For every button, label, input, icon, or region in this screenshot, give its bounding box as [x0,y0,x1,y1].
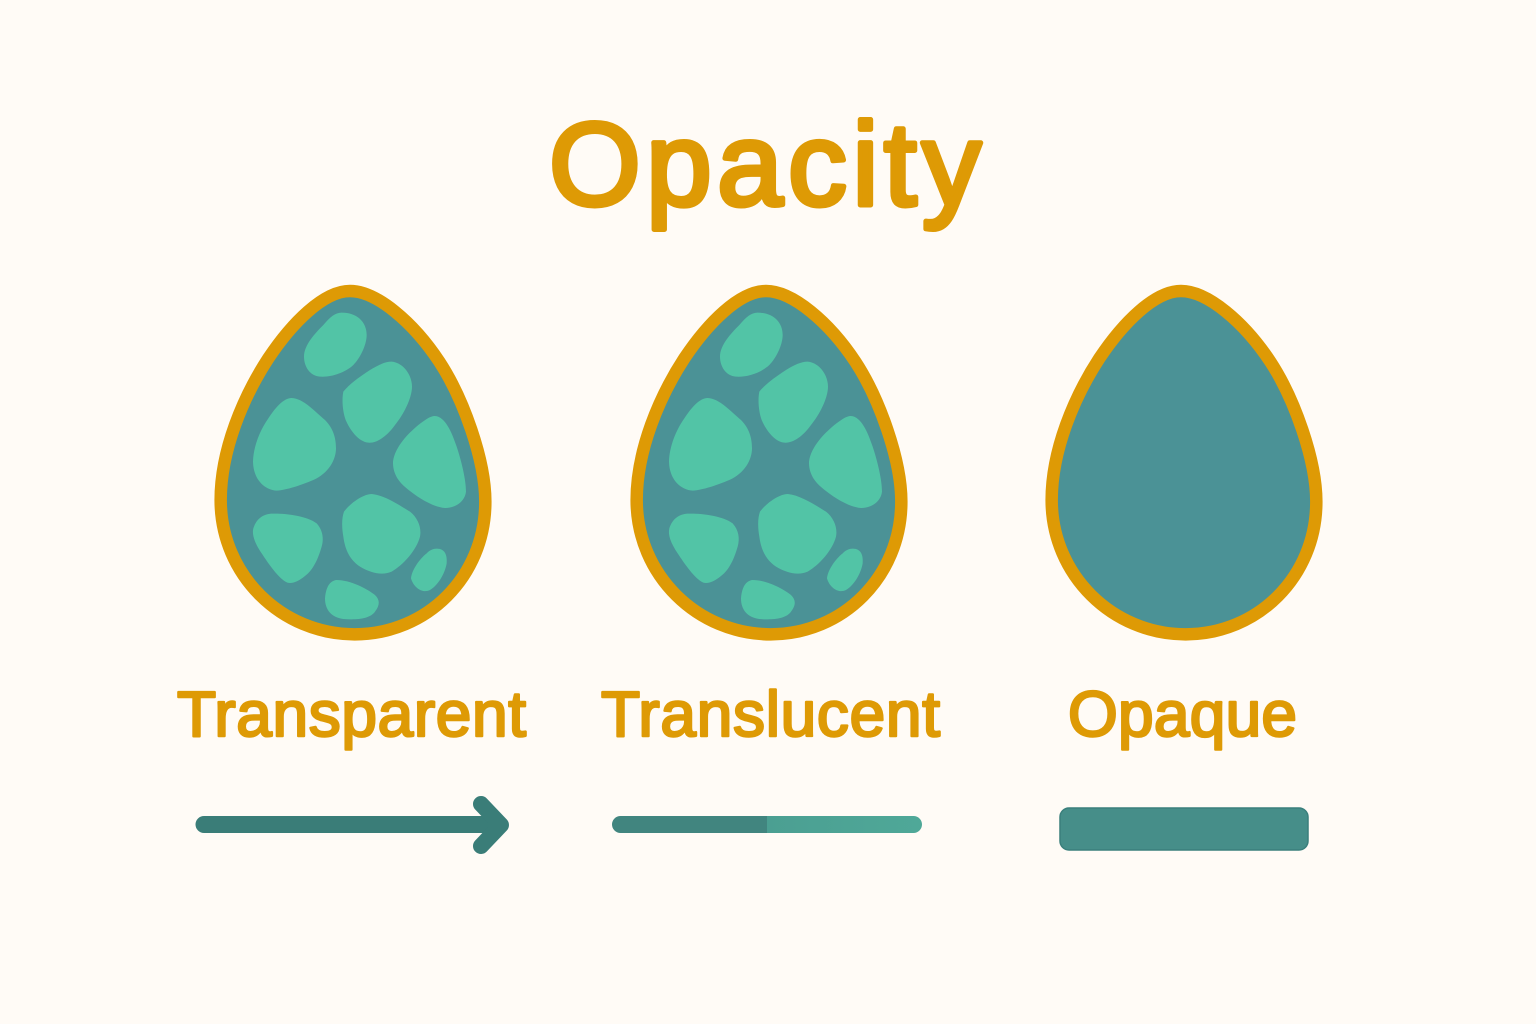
arrow: transparent [204,804,501,846]
egg: opaque [1052,291,1316,634]
title: Opacity [549,99,981,231]
label: translucent: Translucent [601,678,940,750]
bar: translucent [612,816,922,833]
egg: transparent [221,291,485,634]
bar: opaque [1060,808,1308,850]
egg: translucent [637,291,901,634]
label: opaque: Opaque [1068,678,1297,750]
label: transparent: Transparent [177,678,526,750]
